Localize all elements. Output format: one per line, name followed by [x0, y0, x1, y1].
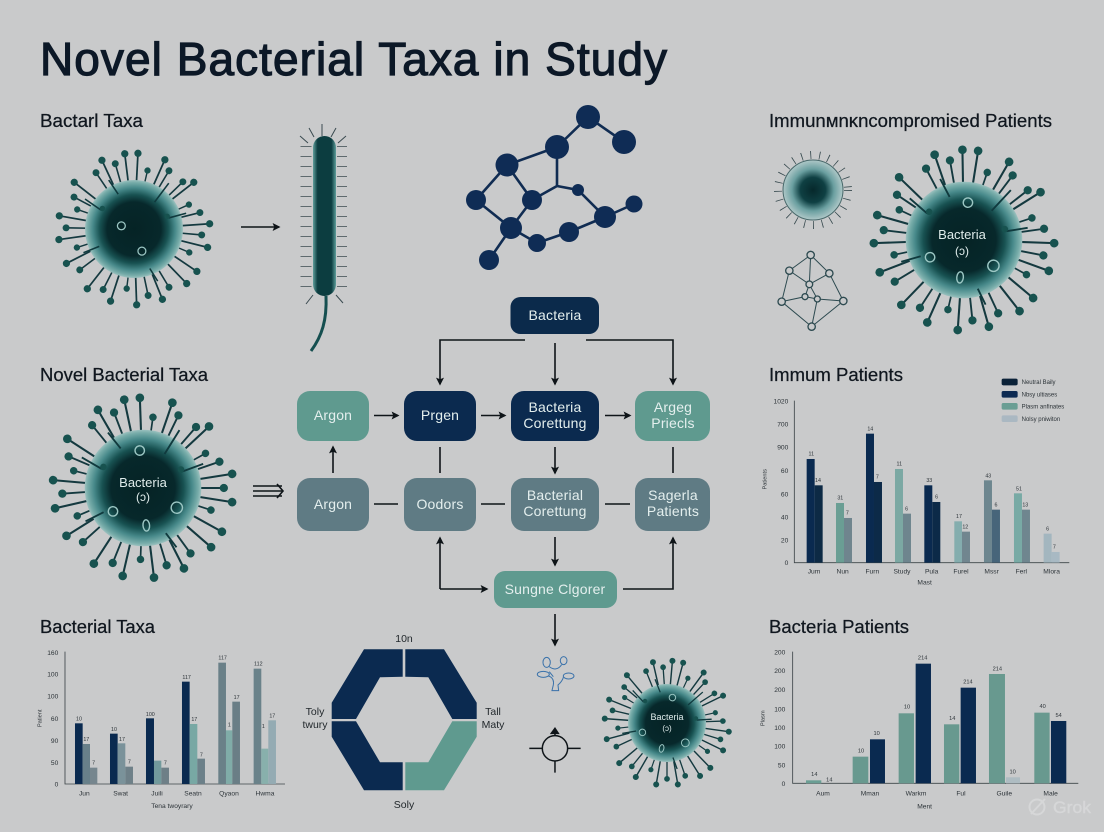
icon: rod bacterium with flagellum [300, 124, 346, 351]
icon: mid-left bacterium with label [41, 385, 246, 591]
box: Bacterial Corettung: Corettung [523, 503, 587, 519]
bar chart: Bacterial Taxa: Juili [151, 791, 163, 798]
box: Oodors: Oodors [416, 496, 464, 512]
box: Argon teal: Argon [314, 407, 352, 423]
donut labels: Maty [482, 719, 505, 731]
bar chart: Immum Patients: Jum [808, 569, 821, 576]
bar chart: Bacterial Taxa: Tena twoyrary [151, 803, 193, 810]
bar chart: Immum Patients: 14 [815, 478, 821, 484]
legend: Nbsy ultiases [1022, 392, 1057, 398]
box: Bacterial Corettung: Bacterial [527, 487, 583, 503]
bar chart: Bacteria Patients: 200 [774, 649, 786, 656]
bar chart: Bacteria Patients: 200 [774, 687, 786, 694]
bar chart: Bacteria Patients: 54 [1055, 713, 1062, 719]
icon: circle with cross lines and arrow [529, 728, 581, 773]
bar chart: Bacterial Taxa: 17 [269, 713, 275, 719]
bar chart: Bacterial Taxa: 7 [92, 761, 95, 767]
box: Prgen: Prgen [421, 407, 459, 423]
bar chart: Bacterial Taxa: 17 [191, 717, 197, 723]
bar chart: Bacteria Patients: 14 [949, 716, 955, 722]
bar chart: Immum Patients: Nun [837, 569, 849, 576]
heading: Bacteria Patients: Bacteria Patients [769, 617, 909, 637]
bar chart: Bacterial Taxa: 7 [164, 760, 167, 766]
donut labels: 10n [395, 633, 413, 645]
icon: bottom bacterium with label [590, 645, 745, 801]
bar chart: Bacterial Taxa: 17 [119, 737, 125, 743]
bar chart: Immum Patients: 20 [781, 537, 789, 544]
box: Bacteria [510, 297, 599, 334]
bar chart: Bacterial Taxa: 160 [47, 650, 59, 657]
icon: spiked bacterium top left [55, 149, 214, 309]
icon: bottom bacterium with label: (ɔ) [662, 724, 672, 733]
bar chart: Bacteria Patients: 50 [778, 762, 786, 769]
bar chart: Bacteria Patients: Aum [816, 791, 830, 798]
legend: Nolsy pniwiton [1022, 417, 1060, 423]
bar chart: Immum Patients: Mast [917, 579, 932, 586]
bar chart: Immum Patients: Mssr [984, 569, 1000, 576]
bar chart: Bacterial Taxa: 90 [51, 738, 59, 745]
flow diagram [297, 297, 710, 645]
donut labels: Tall [485, 706, 501, 718]
icon: molecule network [466, 105, 642, 270]
bar chart: Immum Patients: 13 [1022, 502, 1028, 508]
bar chart: Immum Patients: 60 [781, 491, 789, 498]
bar chart: Immum Patients: 7 [846, 511, 849, 517]
box: Oodors [404, 478, 476, 531]
donut labels: Soly [394, 799, 415, 811]
bar chart: Bacteria Patients: Ful [956, 791, 966, 798]
donut labels: twury [302, 719, 328, 731]
bar chart: Bacteria Patients: 10 [1009, 769, 1016, 775]
bar chart: Bacteria Patients: Guile [997, 791, 1012, 798]
watermark: Grok: Grok [1053, 798, 1092, 817]
heading: Immum Patients: Immum Patients [769, 365, 903, 385]
icon: large bacterium with label: (ɔ) [955, 244, 969, 258]
bar chart: Bacteria Patients: 100 [774, 725, 786, 732]
bar chart: Bacterial Taxa: 1 [228, 722, 231, 728]
bar chart: Immum Patients: 6 [935, 495, 938, 501]
icon: mid-left bacterium with label: (ɔ) [136, 490, 150, 504]
box: Argeg Priecls [635, 391, 710, 441]
bar chart: Bacterial Taxa [37, 650, 285, 810]
bar chart: Bacteria Patients: 214 [963, 680, 973, 686]
bar chart: Bacteria Patients: Ment [917, 804, 932, 811]
bar chart: Bacteria Patients: 200 [774, 668, 786, 675]
bar chart: Bacteria Patients: 100 [774, 706, 786, 713]
heading: Immunocompromised Patients: Immunᴍnᴋncompromised Patients [769, 111, 1052, 131]
bar chart: Bacterial Taxa: 100 [146, 712, 155, 718]
bar chart: Immum Patients: 1020 [774, 399, 789, 406]
bar chart: Bacteria Patients: Mman [861, 791, 880, 798]
bar chart: Bacterial Taxa: 17 [234, 695, 240, 701]
bar chart: Immum Patients: Patients [763, 469, 769, 490]
icon: mid-left bacterium with label: Bacteria [119, 475, 168, 490]
box: Sungne Clgorer: Sungne Clgorer [505, 581, 606, 597]
title: Novel Bacterial Taxa in Study [40, 33, 667, 85]
heading: Bactarl Taxa: Bactarl Taxa [40, 111, 144, 131]
heading: Bacterial Taxa: Bacterial Taxa [40, 617, 156, 637]
bar chart: Immum Patients: 51 [1016, 486, 1022, 492]
bar chart: Immum Patients [763, 379, 1069, 586]
bar chart: Bacterial Taxa: 10 [76, 717, 82, 723]
bar chart: Bacteria Patients [760, 649, 1078, 811]
legend [1002, 379, 1064, 423]
bar chart: Bacterial Taxa: 1 [262, 724, 265, 730]
bar chart: Immum Patients: 17 [956, 514, 962, 520]
bar chart: Immum Patients: 12 [962, 524, 968, 530]
bar chart: Immum Patients: 6 [994, 503, 997, 509]
box: Sagerla Patients: Patients [647, 503, 699, 519]
bar chart: Bacterial Taxa: Qyaon [219, 791, 239, 798]
box: Argon teal [297, 391, 369, 441]
bar chart: Bacteria Patients: Male [1043, 791, 1058, 798]
bar chart: Immum Patients: 900 [777, 445, 789, 452]
bar chart: Bacterial Taxa: Patient [37, 709, 43, 727]
bar chart: Bacterial Taxa: 60 [51, 716, 59, 723]
box: Argon grey: Argon [314, 496, 352, 512]
box: Bacteria: Bacteria [529, 307, 581, 323]
bar chart: Bacterial Taxa: 7 [128, 759, 131, 765]
bar chart: Bacterial Taxa: Jun [79, 791, 90, 798]
donut labels [302, 633, 505, 811]
bar chart: Immum Patients: 31 [837, 496, 843, 502]
bar chart: Immum Patients: 0 [785, 560, 789, 567]
bar chart: Immum Patients: Furn [865, 569, 879, 576]
bar chart: Bacteria Patients: 10 [858, 748, 864, 754]
bar chart: Bacterial Taxa: 112 [254, 662, 263, 668]
icon: blue outline molecule [537, 657, 574, 691]
bar chart: Bacterial Taxa: Swat [113, 791, 128, 798]
bar chart: Immum Patients: 33 [926, 478, 932, 484]
bar chart: Immum Patients: Furel [953, 569, 969, 576]
bar chart: Bacteria Patients: Warkm [906, 791, 927, 798]
bar chart: Bacteria Patients: 14 [826, 777, 832, 783]
legend: Neutral Baily [1022, 380, 1056, 386]
box: Bacterial Corettung [511, 478, 599, 531]
bar chart: Immum Patients: 6 [905, 506, 908, 512]
box: Bacteria Corettung: Bacteria [529, 399, 581, 415]
box: Sagerla Patients: Sagerla [648, 487, 698, 503]
bar chart: Bacteria Patients: Plasm [760, 710, 766, 726]
bar chart: Immum Patients: 40 [781, 514, 789, 521]
legend: Plasm anfinates [1022, 405, 1064, 411]
bar chart: Bacteria Patients: 214 [918, 656, 927, 662]
box: Argon grey [297, 478, 369, 531]
bar chart: Immum Patients: 7 [876, 475, 879, 481]
bar chart: Bacterial Taxa: 10 [111, 727, 117, 733]
flow arrows [333, 340, 673, 645]
bar chart: Bacteria Patients: 0 [782, 781, 786, 788]
bar chart: Immum Patients: 700 [777, 421, 789, 428]
bar chart: Bacteria Patients: 14 [811, 772, 817, 778]
icon: star node network [778, 251, 847, 330]
bar chart: Bacterial Taxa: 50 [51, 760, 59, 767]
donut labels: Toly [306, 706, 325, 718]
arrow: sphere to rod [241, 226, 279, 228]
icon: small cell with hairs [778, 155, 848, 225]
bar chart: Immum Patients: Study [893, 569, 911, 576]
bar chart: Immum Patients: 60 [781, 468, 789, 475]
icon: large bacterium with label: Bacteria [938, 227, 987, 242]
bar chart: Bacteria Patients: 40 [1039, 704, 1046, 710]
icon: large bacterium with label [860, 136, 1068, 344]
box: Sungne Clgorer [494, 571, 617, 608]
bar chart: Immum Patients: Pula [925, 569, 939, 576]
bar chart: Bacteria Patients: 10 [874, 731, 880, 737]
heading: Novel Bacterial Taxa: Novel Bacterial Taxa [40, 365, 209, 385]
donut: hexagonal ring [302, 633, 505, 811]
bar chart: Bacterial Taxa: 117 [182, 675, 191, 681]
bar chart: Bacterial Taxa: Seatn [184, 791, 202, 798]
bar chart: Immum Patients: 7 [1053, 545, 1056, 551]
box: Argeg Priecls: Argeg [654, 399, 692, 415]
watermark: Grok [1030, 798, 1092, 817]
bar chart: Immum Patients: 11 [897, 462, 902, 468]
bar chart: Bacterial Taxa: Hwma [256, 791, 275, 798]
bar chart: Bacterial Taxa: 100 [47, 671, 59, 678]
box: Sagerla Patients [635, 478, 710, 531]
bar chart: Bacterial Taxa: 17 [83, 737, 89, 743]
bar chart: Immum Patients: 14 [867, 426, 873, 432]
bar chart: Immum Patients: 11 [809, 452, 814, 458]
bar chart: Bacterial Taxa: 117 [218, 656, 227, 662]
bar chart: Bacteria Patients: 10 [904, 705, 910, 711]
icon: bottom bacterium with label: Bacteria [650, 712, 684, 722]
box: Bacteria Corettung: Corettung [523, 415, 587, 431]
bar chart: Immum Patients: 43 [985, 473, 991, 479]
bar chart: Immum Patients: Ferl [1016, 569, 1028, 576]
arrow: double arrow into flow [253, 484, 283, 498]
bar chart: Immum Patients: Mlora [1043, 569, 1060, 576]
bar chart: Bacterial Taxa: 0 [55, 781, 59, 788]
bar chart: Bacteria Patients: 214 [993, 666, 1002, 672]
bar chart: Immum Patients: 6 [1046, 526, 1049, 532]
bar chart: Bacterial Taxa: 100 [47, 693, 59, 700]
box: Bacteria Corettung [511, 391, 599, 441]
box: Prgen [404, 391, 476, 441]
bar chart: Bacterial Taxa: 7 [200, 752, 203, 758]
bar chart: Bacteria Patients: 100 [774, 744, 786, 751]
box: Argeg Priecls: Priecls [651, 415, 695, 431]
